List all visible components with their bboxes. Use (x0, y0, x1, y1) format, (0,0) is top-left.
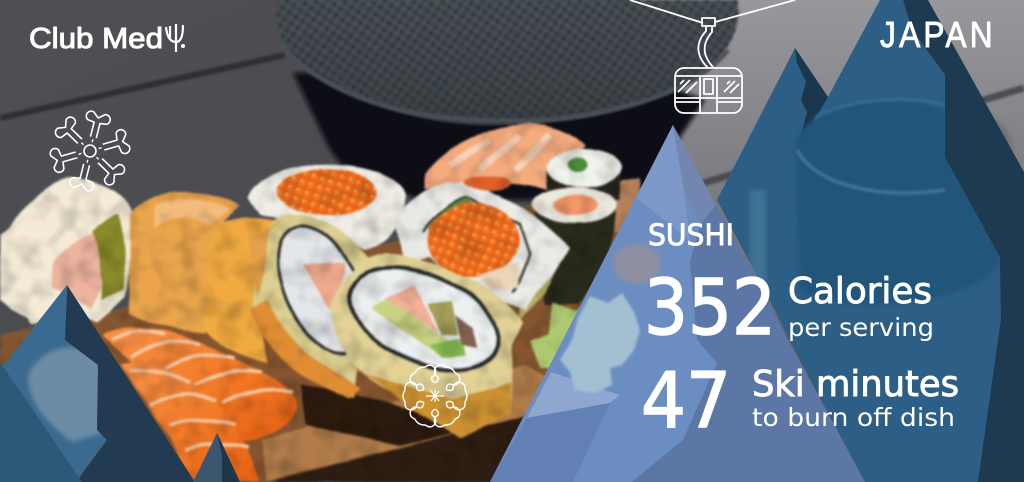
back slice (395, 183, 500, 265)
mountains bottom left (0, 285, 240, 482)
tamago piece two (204, 218, 290, 363)
blurred foreground below cup (780, 320, 1024, 482)
shadow under rolls (300, 385, 520, 445)
door window (704, 79, 713, 94)
blurred plank line on right (690, 88, 1024, 187)
orange crust bits (350, 362, 512, 438)
board light patch (262, 365, 560, 480)
centre ring (84, 145, 96, 157)
minutes sublabel: to burn off dish (752, 403, 955, 432)
tempura roll left (250, 210, 386, 398)
salmon filling (303, 262, 345, 310)
left window stripes (678, 80, 697, 93)
mountain dark face (65, 285, 195, 482)
light triangle left face (490, 125, 717, 482)
crust (332, 252, 522, 438)
eel filling (455, 315, 478, 348)
left orange edge (250, 218, 285, 300)
board front edge (267, 400, 640, 482)
minutes label: Ski minutes (752, 364, 959, 405)
logo trident (166, 24, 183, 52)
roe roll back (248, 165, 406, 250)
outer wrap left (0, 228, 35, 322)
crust bottom (518, 270, 555, 320)
crust (252, 214, 372, 397)
roe center (427, 203, 519, 277)
shadow below teapot (293, 60, 705, 200)
teapot dimple texture (277, 0, 738, 125)
wasabi (530, 300, 590, 368)
cabin (675, 68, 742, 113)
salmon filling (385, 285, 438, 332)
salmon center (552, 195, 598, 215)
roe on top (464, 176, 512, 190)
cup inside mountain (795, 100, 1000, 304)
highlight on cup (750, 190, 766, 290)
icon: snowflake top left (49, 110, 131, 192)
pale ghost of sushi inside mountain (28, 347, 105, 442)
country label: JAPAN (880, 15, 993, 55)
small peak shadow (217, 433, 240, 482)
roll outer (415, 183, 570, 310)
clamp (702, 18, 715, 26)
pickle filling (428, 302, 458, 335)
dark front slope (0, 362, 82, 482)
icon: cable car gondola (630, 0, 795, 113)
green filling (430, 338, 465, 358)
icon: snowflake on sushi (403, 361, 467, 431)
lower face darker (490, 403, 610, 482)
stat: ski minutes (641, 357, 959, 446)
calories label: Calories (788, 271, 932, 312)
nori ring (258, 210, 386, 370)
maki roll tall (532, 187, 618, 305)
roe roll main (395, 176, 570, 320)
rice rim (248, 165, 406, 250)
salmon nigiri front (120, 363, 259, 482)
rice (262, 214, 382, 366)
maki roll small top (547, 149, 621, 205)
white roll (0, 178, 133, 325)
nori side (547, 170, 620, 205)
nori side (534, 205, 617, 305)
avocado filling (92, 214, 126, 300)
teapot rim (281, 44, 728, 121)
pink filling (52, 232, 102, 308)
tamago piece one highlight (155, 199, 230, 228)
plank gap (0, 55, 285, 118)
mountain light face (0, 285, 107, 482)
small peak (193, 433, 240, 482)
triangle upper right face (673, 125, 716, 225)
tempura roll front (331, 244, 522, 438)
cabin door (675, 76, 742, 113)
nori ring (331, 244, 517, 394)
logo: Club Med (29, 23, 185, 55)
logo wordmark: Club Med (29, 23, 163, 55)
minutes number: 47 (641, 357, 731, 446)
blurred tea cup (790, 101, 1005, 318)
right side blurred background (640, 0, 1024, 482)
orange crust (250, 300, 362, 398)
cast iron teapot (277, 0, 738, 125)
big peak dark face (903, 0, 1024, 482)
main blue massif (717, 0, 1001, 482)
ghost salmon through triangle (613, 244, 661, 284)
rice top (532, 187, 618, 223)
right window stripes (724, 81, 739, 93)
light triangle (490, 125, 865, 482)
mountains right (490, 0, 1024, 482)
pale prawn under roe (480, 262, 520, 290)
snowflake arms (49, 110, 131, 192)
hanger (698, 26, 713, 68)
food group (0, 123, 640, 482)
salmon nigiri front stripes (130, 370, 248, 450)
salmon nigiri back (103, 327, 297, 442)
ghost wasabi through triangle (560, 293, 640, 393)
calories number: 352 (644, 264, 776, 353)
triangle upper highlight (636, 125, 690, 240)
rice (337, 249, 511, 389)
avocado (372, 298, 462, 358)
cup top arc (815, 99, 950, 118)
green lettuce (428, 198, 475, 250)
cup rim arc (797, 150, 945, 193)
tamago piece one (130, 192, 240, 333)
shrimp nigiri (425, 123, 586, 190)
stat: calories (644, 264, 934, 353)
logo dot (181, 44, 185, 48)
re-drawn dark face over cup (945, 75, 1024, 482)
cables (630, 0, 795, 23)
salmon nigiri back stripes (112, 330, 292, 402)
orange roe (277, 169, 377, 215)
wooden board (0, 180, 640, 482)
rice top (547, 149, 621, 187)
calories sublabel: per serving (788, 313, 934, 342)
dish name: SUSHI (648, 218, 734, 252)
green center (568, 158, 588, 172)
board right light patch (612, 178, 640, 240)
ghost board reflection (527, 372, 620, 418)
nori and rice edge (423, 198, 530, 292)
roll body (8, 178, 133, 325)
orange tamago rolls (130, 192, 290, 363)
shrimp stripes (450, 135, 550, 170)
dark wedge on middle peak (795, 48, 828, 147)
